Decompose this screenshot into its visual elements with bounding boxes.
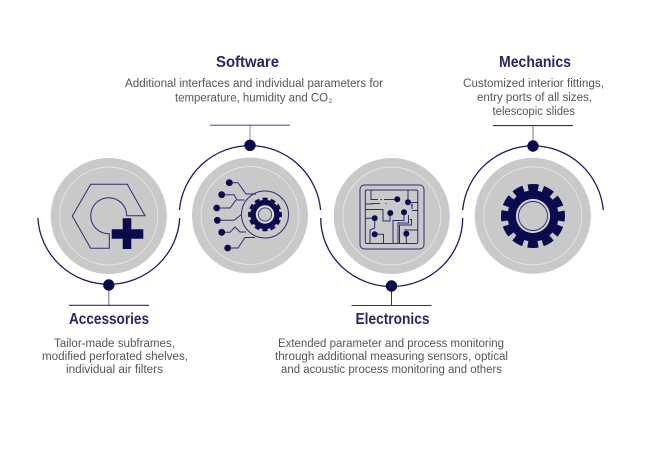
description: electronics: Extended parameter and process monitoring — [278, 338, 504, 350]
description: software — [125, 78, 383, 105]
electronics disc — [334, 158, 450, 274]
description: accessories: Tailor-made subframes, — [54, 338, 175, 350]
mechanics disc — [475, 158, 591, 274]
description: electronics: and acoustic process monitoring and others — [281, 364, 502, 376]
description: mechanics: entry ports of all sizes, — [477, 92, 592, 104]
description: mechanics — [463, 78, 604, 118]
panel: software — [125, 54, 383, 274]
connector arc and dot — [179, 125, 321, 210]
description: accessories — [42, 338, 188, 376]
description: electronics: through additional measuring sensors, optical — [275, 351, 508, 363]
icon: hex nut with plus — [72, 184, 145, 249]
icon: gear with circuit traces — [213, 179, 288, 251]
description: software: 2 — [328, 98, 332, 105]
description: accessories: modified perforated shelves, — [42, 351, 188, 363]
icon: gear — [506, 188, 560, 244]
description: electronics — [275, 338, 508, 376]
panel: electronics — [275, 158, 508, 376]
heading: software: Software — [216, 54, 279, 71]
heading: accessories: Accessories — [69, 311, 149, 328]
description: accessories: individual air filters — [66, 364, 163, 376]
description: mechanics: Customized interior fittings, — [463, 78, 604, 90]
connector arc and dot — [463, 126, 603, 210]
software disc — [192, 158, 308, 274]
heading: mechanics: Mechanics — [499, 54, 571, 71]
panel: mechanics — [463, 54, 604, 274]
description: software: Additional interfaces and individual parameters for — [125, 78, 383, 90]
icon: circuit board — [360, 185, 424, 249]
heading: electronics: Electronics — [356, 311, 430, 328]
panel: accessories — [38, 158, 188, 376]
connector arc and dot — [38, 218, 180, 305]
description: mechanics: telescopic slides — [492, 106, 575, 118]
connector arc and dot — [321, 218, 463, 306]
accessories disc — [51, 158, 167, 274]
description: software: temperature, humidity and CO — [175, 92, 328, 104]
